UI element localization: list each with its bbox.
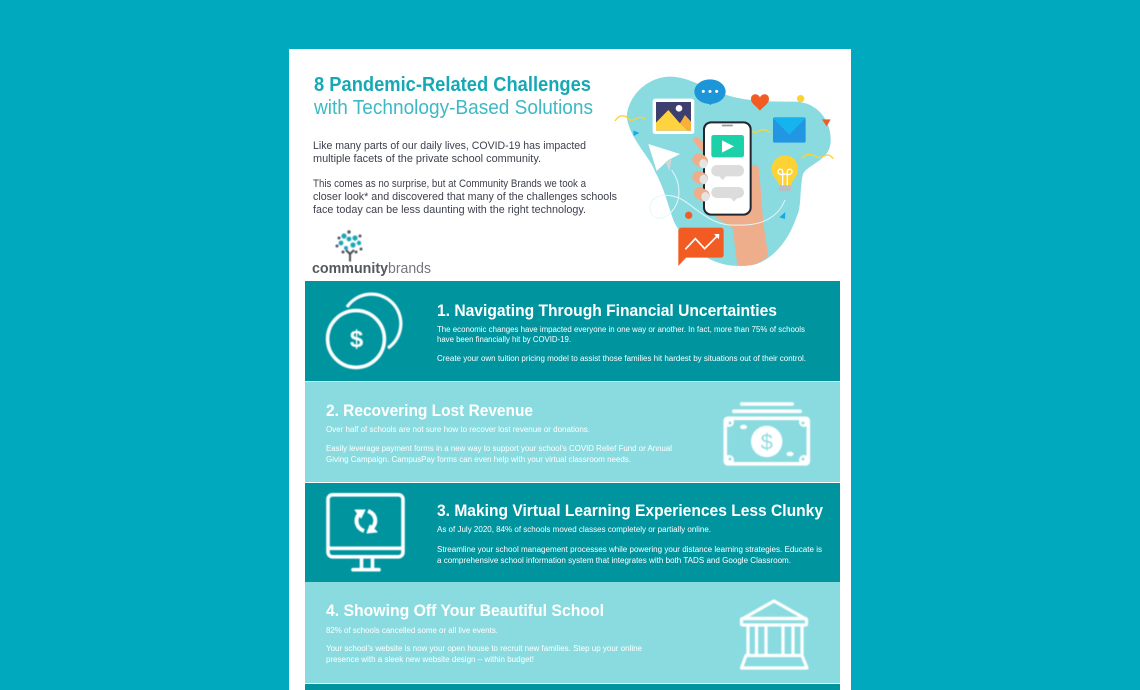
text 2 — [326, 425, 672, 464]
hand — [692, 137, 768, 266]
panel 4: beautiful school — [305, 582, 840, 683]
icon: banknote: $ — [761, 430, 773, 454]
intro text: This comes as no surprise, but at Community Brands we took a — [313, 178, 586, 190]
panel 1: financial uncertainties — [305, 281, 840, 381]
icon: heart — [751, 94, 769, 111]
intro text: face today can be less daunting with the right technology. — [313, 204, 586, 216]
heading 4: 4. Showing Off Your Beautiful School — [326, 601, 604, 620]
video tile — [711, 135, 744, 157]
heading 2: 2. Recovering Lost Revenue — [326, 401, 533, 420]
text 4: Your school’s website is now your open house to recruit new families. Step up your online — [326, 644, 643, 653]
icon: coins — [328, 294, 401, 367]
icon: speech bubble — [694, 79, 726, 105]
icon: chart bubble — [678, 228, 724, 266]
text 3: a comprehensive school information system that integrates with both TADS and Google Classroom. — [437, 556, 791, 565]
icon: picture frame — [653, 99, 694, 134]
yellow squiggles — [615, 116, 833, 159]
text 2: Giving Campaign. CampusPay forms can even help with your virtual classroom needs. — [326, 455, 631, 464]
text 1: The economic changes have impacted everyone in one way or another. In fact, more than 75% of schools — [437, 325, 805, 334]
logo: community brands — [312, 230, 431, 277]
fingernails — [699, 159, 709, 201]
heading 3: 3. Making Virtual Learning Experiences Less Clunky — [437, 501, 824, 520]
chat bubbles — [711, 165, 744, 202]
text 4: 82% of schools cancelled some or all live events. — [326, 626, 498, 635]
logo: community brands: community — [312, 260, 389, 277]
text 1 — [437, 325, 806, 363]
icon: envelope — [773, 117, 806, 143]
text 1: Create your own tuition pricing model to assist those families hit hardest by situations out of their control. — [437, 354, 806, 363]
title: 8 Pandemic-Related Challenges — [314, 74, 591, 96]
icon: school building — [742, 601, 807, 668]
heading 1: 1. Navigating Through Financial Uncertainties — [437, 301, 777, 320]
panel 2: lost revenue — [305, 382, 840, 482]
text 3 — [437, 525, 822, 565]
icon: banknote — [724, 402, 809, 465]
intro text: multiple facets of the private school community. — [313, 153, 541, 165]
intro text — [313, 140, 618, 216]
intro text: closer look* and discovered that many of the challenges schools — [313, 191, 618, 203]
text 4: presence with a sleek new website design – within budget! — [326, 655, 534, 664]
text 1: have been financially hit by COVID-19. — [437, 335, 571, 344]
title: with Technology-Based Solutions — [313, 97, 593, 119]
icon: triangles — [633, 119, 831, 219]
panel 5: next section edge — [305, 684, 840, 690]
text 4 — [326, 626, 643, 664]
intro text: Like many parts of our daily lives, COVID-19 has impacted — [313, 140, 586, 152]
text 2: Easily leverage payment forms in a new way to support your school’s COVID Relief Fund or Annual — [326, 444, 672, 453]
title — [313, 74, 593, 119]
panel 3: virtual learning — [305, 483, 840, 582]
illustration: phone in hand with floating icons — [615, 77, 833, 266]
fingers — [690, 151, 712, 204]
text 2: Over half of schools are not sure how to recover lost revenue or donations. — [326, 425, 590, 434]
white document page — [289, 49, 851, 690]
icon: paper plane — [648, 144, 680, 172]
logo: community brands: brands — [388, 260, 431, 277]
icon: light bulb — [772, 156, 798, 191]
icon: yellow dot — [797, 95, 804, 102]
illustration blob — [627, 77, 831, 266]
text 3: As of July 2020, 84% of schools moved classes completely or partially online. — [437, 525, 711, 534]
looping line — [650, 170, 785, 225]
icon: monitor — [328, 495, 403, 570]
text 3: Streamline your school management processes while powering your distance learning strategies. Educate is — [437, 545, 822, 554]
icon: orange dot — [685, 212, 692, 219]
icon: coins: $ — [350, 326, 364, 353]
phone — [703, 121, 752, 216]
